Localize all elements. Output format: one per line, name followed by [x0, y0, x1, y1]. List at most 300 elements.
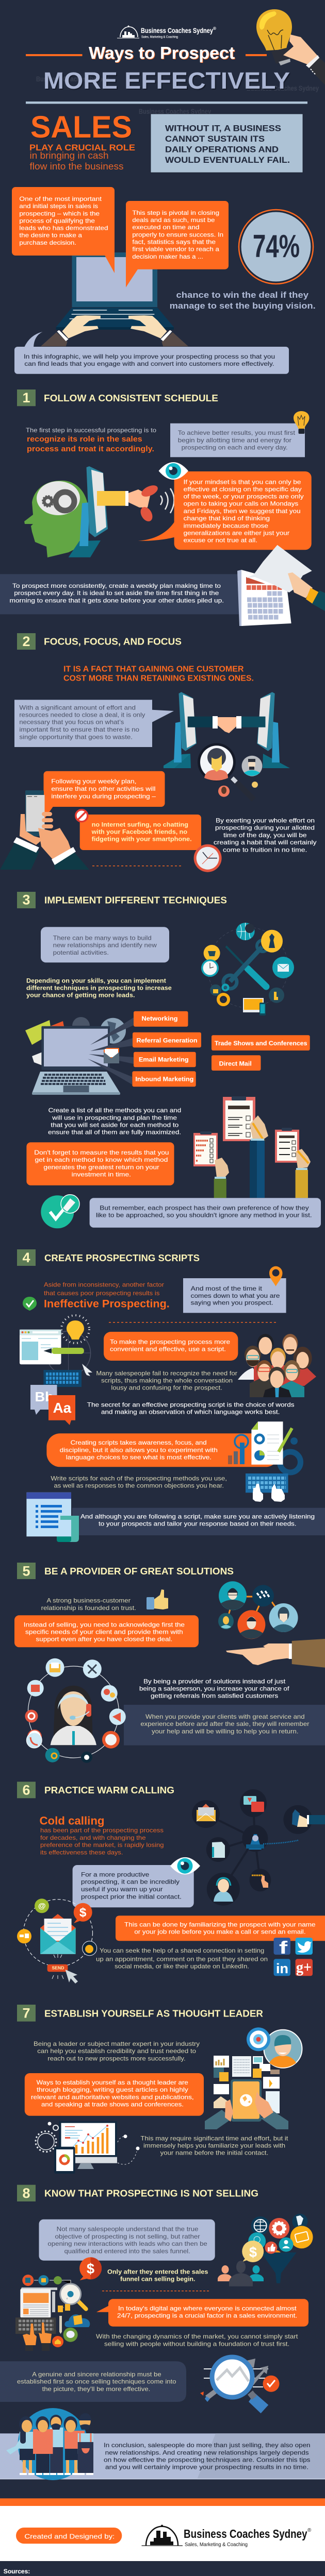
callout: true objective [39, 2219, 215, 2261]
stat: 74 percent: chance to win the deal if they [176, 290, 309, 300]
speech bubble: mindset: and Fridays, then we suggest that you [184, 507, 301, 515]
callout: true objective: opening new interactions with leads who can then be [47, 2240, 207, 2247]
text: exerting effort: prospecting during your allotted [215, 824, 315, 832]
callout: familiarize [116, 1916, 325, 1941]
speech bubble: mindset [138, 471, 312, 550]
icon: dollar bubble: $ [87, 2261, 94, 2277]
band: active listening: to your prospects and tailor your response based on their needs. [99, 1520, 296, 1528]
speech bubble: mindset: effective at closing on the specific day [184, 485, 302, 493]
band: active listening [72, 1508, 325, 1535]
icon: small bulb [294, 411, 310, 434]
text: exerting effort: come to fruition in no time. [223, 846, 307, 853]
speech bubble: mindset: If your mindset is that you can only be [184, 478, 301, 485]
illustration: thought leader with tablet [205, 2027, 302, 2129]
text: trust [41, 1597, 136, 1612]
text: significant time: This may require significant time and effort, but it [140, 2134, 288, 2142]
icon: eye [170, 1857, 200, 1874]
text: list of methods: will use in prospecting and plan the time [52, 1114, 177, 1121]
text: conclusion: and you will certainly improve your prospecting results in no time. [105, 2464, 308, 2471]
speech bubble: prospecting: process of qualifying the [19, 217, 95, 225]
text: shared connection [96, 1947, 268, 1970]
icon: light bulb in hand [256, 9, 325, 85]
text: significant time: your name before the initial contact. [160, 2149, 268, 2157]
speech bubble: weekly plan: ensure that no other activities will [51, 785, 155, 792]
text: many salespeople fail: lousy and confusing for the prospect. [111, 1384, 222, 1392]
speech bubble: mindset: of the week, or your prospects are only [184, 493, 304, 500]
callout: effort [14, 700, 174, 747]
panel: conclusion band [0, 2408, 325, 2480]
callout: without it: DAILY OPERATIONS AND [165, 144, 279, 155]
panel: section 2 [0, 633, 317, 872]
callout: measure results [26, 1142, 174, 1185]
logo: Sales, Marketing & Coaching [141, 35, 178, 39]
text: secret: The secret for an effective prospecting script is the choice of words [87, 1401, 295, 1408]
heading 2 [17, 633, 182, 650]
heading 5: 5 [22, 1563, 30, 1579]
callout: without it: WOULD EVENTUALLY FAIL. [165, 155, 290, 165]
callout: better results: begin by allotting time and energy for [178, 436, 291, 444]
title line 2: MORE EFFECTIVELY [43, 67, 290, 94]
text: sales funnel [107, 2268, 208, 2282]
text: changing dynamics: selling with people without building a foundation of trust first. [104, 2340, 289, 2347]
text: cold calling [39, 1815, 164, 1856]
intro callout [14, 332, 289, 374]
illustration: tools circle [201, 923, 294, 1015]
text: secret [87, 1401, 295, 1415]
icon: clock [194, 844, 222, 872]
band: weekly plan [0, 574, 240, 614]
buttons: prospecting techniques [132, 1011, 310, 1087]
logo [117, 26, 216, 39]
speech bubble: pivotal step: decision maker has a ... [132, 253, 203, 260]
callout: warm up: useful if you warm up your [81, 1886, 163, 1893]
callout: each prospect [90, 1198, 321, 1228]
speech bubble: digital age [96, 2299, 308, 2327]
callout: ways to establish: through blogging, writing guest articles on highly [37, 2086, 188, 2093]
text: cold calling: for decades, and with changing the [40, 1834, 146, 1841]
illustration: email send: SEND [52, 1965, 64, 1970]
logo: ® [213, 26, 216, 31]
heading 2: FOCUS, FOCUS, AND FOCUS [44, 637, 182, 647]
speech bubble: pivotal step: first viable vendor to reach a [132, 246, 219, 253]
buttons: prospecting techniques: Referral Generation [136, 1037, 198, 1044]
speech bubble: weekly plan: interfere you during prospecting – [51, 792, 156, 800]
icon: green check shield [23, 1297, 37, 1311]
callout: ways to establish: and speaking at trade shows and conferences. [41, 2100, 184, 2108]
speech bubble: pivotal step: executed on time and [132, 224, 199, 231]
text: exerting effort [214, 817, 317, 853]
callout: warm up: prospecting, it can be incredibly [81, 1878, 180, 1886]
text: exerting effort: By exerting your whole effort on [216, 817, 315, 824]
illustration: handshake through monitors [164, 692, 290, 768]
callout: measure results: investment in time. [72, 1171, 131, 1178]
heading 6: 6 [22, 1782, 30, 1798]
sales statement: PLAY A CRUCIAL ROLE [29, 143, 135, 152]
text: exerting effort: creating a habit that will certainly [214, 839, 317, 846]
heading 3: IMPLEMENT DIFFERENT TECHNIQUES [44, 895, 227, 905]
callout: without it [151, 114, 303, 173]
laptop with typing hands [41, 252, 188, 346]
band: genuine relationship: established first so once selling techniques come into [17, 2378, 176, 2385]
callout: use a script: To make the prospecting process more [110, 1338, 230, 1346]
fact statement: IT IS A FACT THAT GAINING ONE CUSTOMER [63, 665, 243, 673]
text: sales funnel: funnel can selling begin. [120, 2275, 195, 2282]
band: great service: experience before and after the sale, they will remember [140, 1720, 310, 1727]
text: depending on skills: Depending on your skills, you can implement [26, 977, 166, 984]
callout: creating scripts: discipline, but it also allows you to experiment with [60, 1446, 218, 1453]
callout: warm up: prospect prior the initial contact. [81, 1893, 182, 1900]
text: conclusion: on how effective the prospecting techniques are. Consider this tips [104, 2456, 311, 2463]
heading 3: 3 [22, 892, 30, 908]
speech bubble: prospecting: prospecting – which is the [19, 210, 100, 217]
text: shared connection: You can seek the help of a shared connection in setting [100, 1947, 264, 1954]
illustration: support agent with service icons [25, 1658, 126, 1763]
callout: instead of selling [14, 1615, 199, 1647]
speech bubble: pivotal step: deals and as such, must be [132, 216, 215, 224]
speech bubble: prospecting: One of the most important [19, 195, 102, 202]
icon: thumbs up [147, 1589, 168, 1609]
text: ineffective prospecting: Ineffective Prospecting. [44, 1298, 170, 1310]
speech bubble: prospecting: and initial steps in sales is [19, 202, 98, 210]
icon: language bubbles: Bb [35, 1389, 54, 1404]
heading 5: BE A PROVIDER OF GREAT SOLUTIONS [44, 1566, 234, 1577]
speech bubble: prospecting: the desire to make a [19, 232, 82, 239]
callout: without it: CANNOT SUSTAIN ITS [165, 134, 265, 144]
callout: creating scripts [46, 1433, 279, 1467]
callout: what you say: saying when you prospect. [191, 1299, 273, 1307]
callout: each prospect: like to be approached, so you shouldn't ignore any method in your list. [96, 1211, 312, 1218]
illustration: head, monitor and phone [24, 466, 174, 557]
heading 1: 1 [22, 390, 30, 405]
band: genuine relationship: the picture, they'll be more effective. [42, 2385, 150, 2393]
illustration: email send: $ [79, 1906, 87, 1920]
panel: section 5 [14, 1563, 325, 1763]
band: weekly plan: prospect every day. It is ideal to set aside the time first thing in the [14, 589, 219, 597]
callout: warm up [73, 1865, 194, 1907]
heading 6: PRACTICE WARM CALLING [44, 1785, 174, 1795]
text: first step [26, 427, 156, 453]
illustration: reports and keyboard [228, 1421, 300, 1502]
callout: measure results: Don't forget to measure the results that you [34, 1149, 169, 1156]
illustration: calendar and hand [237, 545, 325, 626]
speech bubble: digital age: In today's digital age where everyone is connected almost [118, 2304, 297, 2312]
callout: instead of selling: specific needs of your client and provide them with [25, 1628, 183, 1635]
illustration: funnel with customers [218, 2214, 313, 2286]
callout: true objective: objective of prospecting is not selling, but rather [55, 2233, 200, 2240]
buttons: prospecting techniques: Inbound Marketing [135, 1076, 193, 1083]
heading 4: CREATE PROSPECTING SCRIPTS [44, 1253, 200, 1263]
text: depending on skills: different techniques in prospecting to increase [26, 985, 172, 992]
heading 6 [17, 1782, 174, 1798]
text: being a leader: can help you establish credibility and trust needed to [37, 2047, 196, 2055]
text: many salespeople fail: Many salespeople fail to recognize the need for [96, 1369, 237, 1377]
callout: use a script [104, 1332, 238, 1361]
text: being a leader: reach out to new prospects more successfully. [47, 2055, 186, 2062]
logo: business coaches sydney: Sales, Marketing & Coaching [185, 2541, 248, 2548]
text: write scripts [51, 1475, 227, 1489]
callout: what you say: comes down to what you are [191, 1292, 280, 1299]
speech bubble: pivotal step: properly to ensure success. In [132, 231, 223, 238]
text: cold calling: preference of the market, is rapidly losing [40, 1841, 164, 1849]
panel: section 6 [17, 1782, 325, 1984]
heading 8 [17, 2185, 258, 2201]
callout: familiarize: This can be done by familiarizing the prospect with your name [124, 1921, 316, 1928]
callout: many ways: potential activities. [53, 949, 109, 956]
buttons: prospecting techniques: Trade Shows and Conferences [215, 1040, 307, 1047]
sales statement: flow into the business [30, 161, 124, 172]
buttons: prospecting techniques: Direct Mail [219, 1060, 252, 1067]
panel: section 3 [17, 892, 321, 1228]
speech bubble: weekly plan: Following your weekly plan, [51, 778, 136, 785]
callout: without it: WITHOUT IT, A BUSINESS [165, 124, 281, 133]
heading 7: ESTABLISH YOURSELF AS THOUGHT LEADER [44, 2008, 263, 2019]
icon: eye [159, 462, 188, 480]
buttons: prospecting techniques: Email Marketing [139, 1056, 189, 1063]
illustration: team of people [6, 2408, 93, 2480]
illustration: business people group [238, 1334, 316, 1397]
band: active listening: And although you are following a script, make sure you are actively listening [80, 1513, 315, 1520]
text: provider of solutions [139, 1677, 289, 1700]
callout: many ways [41, 927, 169, 962]
callout: measure results: generates the greatest return on your [43, 1163, 159, 1171]
text: conclusion: new relationships. And creating new relationships largely depends [105, 2449, 309, 2456]
text: first step: recognize its role in the sales [27, 435, 142, 444]
text: cold calling: its effectiveness these days. [40, 1849, 123, 1856]
text: cold calling: has been part of the prospecting process [40, 1827, 164, 1834]
text: shared connection: up an appointment, comment on the post they shared on [96, 1956, 268, 1963]
speech bubble: digital age: 24/7, prospecting is a crucial factor in a sales environment. [117, 2312, 297, 2319]
speech bubble: mindset: excuse or not true at all. [184, 537, 257, 544]
callout: warm up: For a more productive [81, 1871, 150, 1878]
watermarks [36, 75, 319, 115]
icon: check with highlighter [41, 1195, 79, 1228]
text: provider of solutions: being a salesperson, you increase your chance of [139, 1685, 289, 1692]
logo: business coaches sydney [141, 2524, 312, 2548]
callout: effort: single opportunity that goes to waste. [19, 733, 133, 740]
callout: true objective: Not many salespeople understand that the true [57, 2226, 199, 2233]
callout: familiarize: or your job role before you make a call or send an email. [134, 1928, 306, 1935]
callout: true objective: qualified and entered into the sales funnel. [64, 2247, 190, 2255]
heading 8: 8 [22, 2185, 30, 2201]
heading 7 [17, 2005, 263, 2022]
stat: 74 percent [170, 210, 316, 311]
text: exerting effort: time of the day, you will be [223, 832, 307, 839]
heading 7: 7 [22, 2006, 30, 2021]
illustration: magnifier with prospects [198, 743, 262, 800]
text: list of methods: ensure that all of them are fully maximized. [48, 1129, 181, 1136]
text: many salespeople fail: scripts, thus making the whole conversation [101, 1377, 233, 1384]
text: many salespeople fail [96, 1369, 237, 1392]
button: created and designed by: Created and Designed by: [24, 2532, 115, 2540]
band: great service [124, 1705, 325, 1745]
speech bubble: pivotal step [126, 201, 229, 287]
callout: better results: prospecting on each and every day. [182, 444, 288, 451]
icon: language bubbles: Aa [53, 1400, 71, 1416]
text: depending on skills: your chance of getting more leads. [26, 992, 135, 999]
sales statement: in bringing in cash [30, 150, 109, 161]
heading 2: 2 [22, 634, 30, 649]
buttons: prospecting techniques: Networking [141, 1015, 177, 1022]
callout: effort: resources needed to close a deal, it is only [19, 711, 145, 719]
callout: instead of selling: Instead of selling, you need to acknowledge first the [24, 1621, 185, 1628]
watermarks: Business Coaches Sydney [36, 75, 108, 83]
panel: credits [0, 2498, 325, 2576]
text: sales funnel: Only after they entered the sales [107, 2268, 208, 2275]
callout: what you say: And most of the time it [191, 1285, 263, 1292]
text: provider of solutions: getting referrals from satisfied customers [151, 1692, 278, 1700]
text: list of methods [48, 1107, 181, 1136]
callout: instead of selling: support even after you have closed the deal. [36, 1636, 172, 1643]
text: first step: process and treat it accordingly. [27, 445, 154, 453]
callout: ways to establish: relevant and authoritative websites and publications, [31, 2093, 194, 2100]
text: shared connection: social media, or like their update on LinkedIn. [115, 1963, 249, 1970]
illustration: laptop with techniques [25, 1017, 134, 1095]
illustration: script scroll [26, 1493, 79, 1542]
callout: many ways: new relationships and identify new [53, 942, 157, 949]
callout: measure results: get in each method to know which method [35, 1156, 168, 1163]
callout: effort: important first to ensure that there is no [19, 726, 139, 733]
text: ineffective prospecting: Aside from inconsistency, another factor [44, 1281, 164, 1288]
panel: section 1 [0, 389, 325, 626]
heading 4 [17, 1249, 200, 1266]
text: changing dynamics: With the changing dynamics of the market, you cannot simply start [96, 2333, 298, 2340]
sales statement [29, 110, 135, 172]
illustration: customer network on open hand [218, 1581, 325, 1668]
heading 1 [17, 389, 218, 406]
illustration: phone network [192, 1789, 325, 1906]
icon: language bubbles [30, 1385, 75, 1425]
illustration: funnel with customers: $ [249, 2244, 257, 2260]
text: changing dynamics [96, 2333, 298, 2347]
speech bubble: no distractions: with your Facebook friends, no [91, 828, 187, 835]
speech bubble: no distractions: fidgeting with your smartphone. [92, 836, 192, 843]
speech bubble: no distractions: no Internet surfing, no chatting [92, 821, 188, 828]
text: sources: Sources: [4, 2568, 30, 2575]
intro callout: In this infographic, we will help you improve your prospecting process so that you [24, 353, 275, 360]
panel: section 7 [17, 2005, 302, 2174]
text: cold calling: Cold calling [39, 1815, 104, 1827]
text: first step: The first step in successful prospecting is to [26, 427, 156, 434]
band: great service: When you provide your clients with great service and [145, 1713, 305, 1720]
text: ineffective prospecting [44, 1281, 170, 1310]
title line 1 [26, 44, 267, 63]
button: created and designed by [16, 2528, 122, 2544]
panel: section 4 [17, 1249, 325, 1542]
intro callout: can find leads that you engage with and convert into customers more effectively. [24, 360, 274, 367]
text: trust: A strong business-customer [46, 1597, 131, 1604]
speech bubble: mindset: open to taking your calls on Mondays [184, 500, 298, 507]
watermarks: Business Coaches Sydney [139, 107, 211, 115]
callout: each prospect: But remember, each prospect has their own preference of how they [100, 1204, 309, 1211]
stat: 74 percent: manage to set the buying vision. [170, 301, 316, 311]
illustration: email send [17, 1899, 97, 1984]
illustration: workflow with document and keyboard [15, 2275, 90, 2351]
heading 8: KNOW THAT PROSPECTING IS NOT SELLING [44, 2189, 258, 2199]
text: significant time: immensely helps you familiarize your leads with [143, 2142, 285, 2149]
text: write scripts: as well as responses to the common objections you hear. [54, 1482, 224, 1489]
speech bubble: prospecting: leads who has demonstrated [19, 225, 108, 232]
illustration: email send: @ [38, 1902, 46, 1910]
text: secret: and making an observation of which language works best. [101, 1408, 280, 1415]
speech bubble: prospecting [12, 187, 115, 273]
speech bubble: no distractions [80, 815, 201, 850]
speech bubble: mindset: change that kind of thinking [184, 515, 270, 522]
logo: Business Coaches Sydney [141, 26, 213, 35]
illustration: magnifier with growth arrows [200, 2357, 280, 2413]
callout: better results: To achieve better results, you must first [178, 429, 296, 436]
sales statement: SALES [30, 110, 132, 144]
callout: effort: With a significant amount of effort and [19, 704, 136, 711]
callout: ways to establish: Ways to establish yourself as a thought leader are [37, 2079, 188, 2086]
text: provider of solutions: By being a provider of solutions instead of just [143, 1677, 286, 1685]
callout: better results [170, 423, 305, 457]
speech bubble: prospecting: purchase decision. [19, 239, 76, 246]
text: conclusion: In conclusion, salespeople do more than just selling, they also open [104, 2442, 311, 2449]
callout: ways to establish [25, 2073, 204, 2116]
stat: 74 percent: 74% [253, 229, 300, 264]
callout: effort: necessary that you focus on what’s [19, 719, 124, 726]
callout: what you say [183, 1278, 286, 1313]
speech bubble: mindset: generalizations are either just your [184, 529, 289, 536]
callout: use a script: convenient and effective, use a script. [110, 1346, 226, 1353]
speech bubble: weekly plan [43, 771, 165, 820]
panel: section 8 [0, 2185, 313, 2413]
illustration: hands on smartphone [0, 790, 89, 870]
text: being a leader [34, 2040, 200, 2062]
heading 5 [17, 1563, 234, 1579]
band: genuine relationship [0, 2361, 186, 2402]
icons: social media: g+ [296, 1959, 312, 1976]
callout: creating scripts: Creating scripts takes awareness, focus, and [71, 1439, 207, 1446]
heading 1: FOLLOW A CONSISTENT SCHEDULE [44, 393, 218, 403]
callout: creating scripts: language choices to see what is most effective. [66, 1453, 212, 1461]
title line 1: Ways to Prospect [89, 44, 235, 63]
heading 4: 4 [22, 1250, 30, 1265]
text: conclusion [104, 2442, 311, 2471]
text: ineffective prospecting: that causes poor prospecting results is [44, 1290, 159, 1297]
text: list of methods: that you will set aside for each method to [51, 1121, 179, 1128]
text: depending on skills [26, 977, 172, 999]
illustration: analytics monitor [36, 2121, 139, 2174]
callout: many ways: There can be many ways to build [53, 934, 152, 941]
speech bubble: pivotal step: This step is pivotal in closing [132, 209, 219, 216]
icon: dollar bubble [79, 2257, 102, 2280]
icons: social media: f [279, 1938, 288, 1958]
panel: header [12, 9, 325, 374]
text: significant time [140, 2134, 288, 2157]
band: great service: your help and will be willing to help you in return. [152, 1727, 299, 1735]
heading 3 [17, 892, 227, 908]
text: being a leader: Being a leader or subject matter expert in your industry [34, 2040, 200, 2047]
icons: social media [273, 1938, 313, 1976]
icons: social media: in [276, 1961, 288, 1976]
band: genuine relationship: A genuine and sincere relationship must be [32, 2371, 161, 2378]
illustration: hands holding checklists [193, 1096, 311, 1198]
speech bubble: pivotal step: fact, statistics says that the [132, 238, 216, 245]
icon: location pin [269, 1266, 283, 1286]
band: weekly plan: morning to ensure that it gets done before your other duties piled up. [9, 597, 224, 604]
text: trust: relationship is founded on trust. [41, 1604, 136, 1612]
text: write scripts: Write scripts for each of the prospecting methods you use, [51, 1475, 227, 1482]
fact statement: COST MORE THAN RETAINING EXISTING ONES. [63, 674, 254, 683]
logo: business coaches sydney: ® [307, 2528, 312, 2533]
fact statement [63, 665, 254, 683]
band: weekly plan: To prospect more consistently, create a weekly plan making time to [12, 582, 221, 589]
illustration: browser, bulb, keyboard [20, 1315, 92, 1387]
speech bubble: mindset: immediately because those [184, 522, 268, 529]
text: list of methods: Create a list of all the methods you can and [48, 1107, 181, 1114]
icon: no sign [76, 810, 88, 822]
